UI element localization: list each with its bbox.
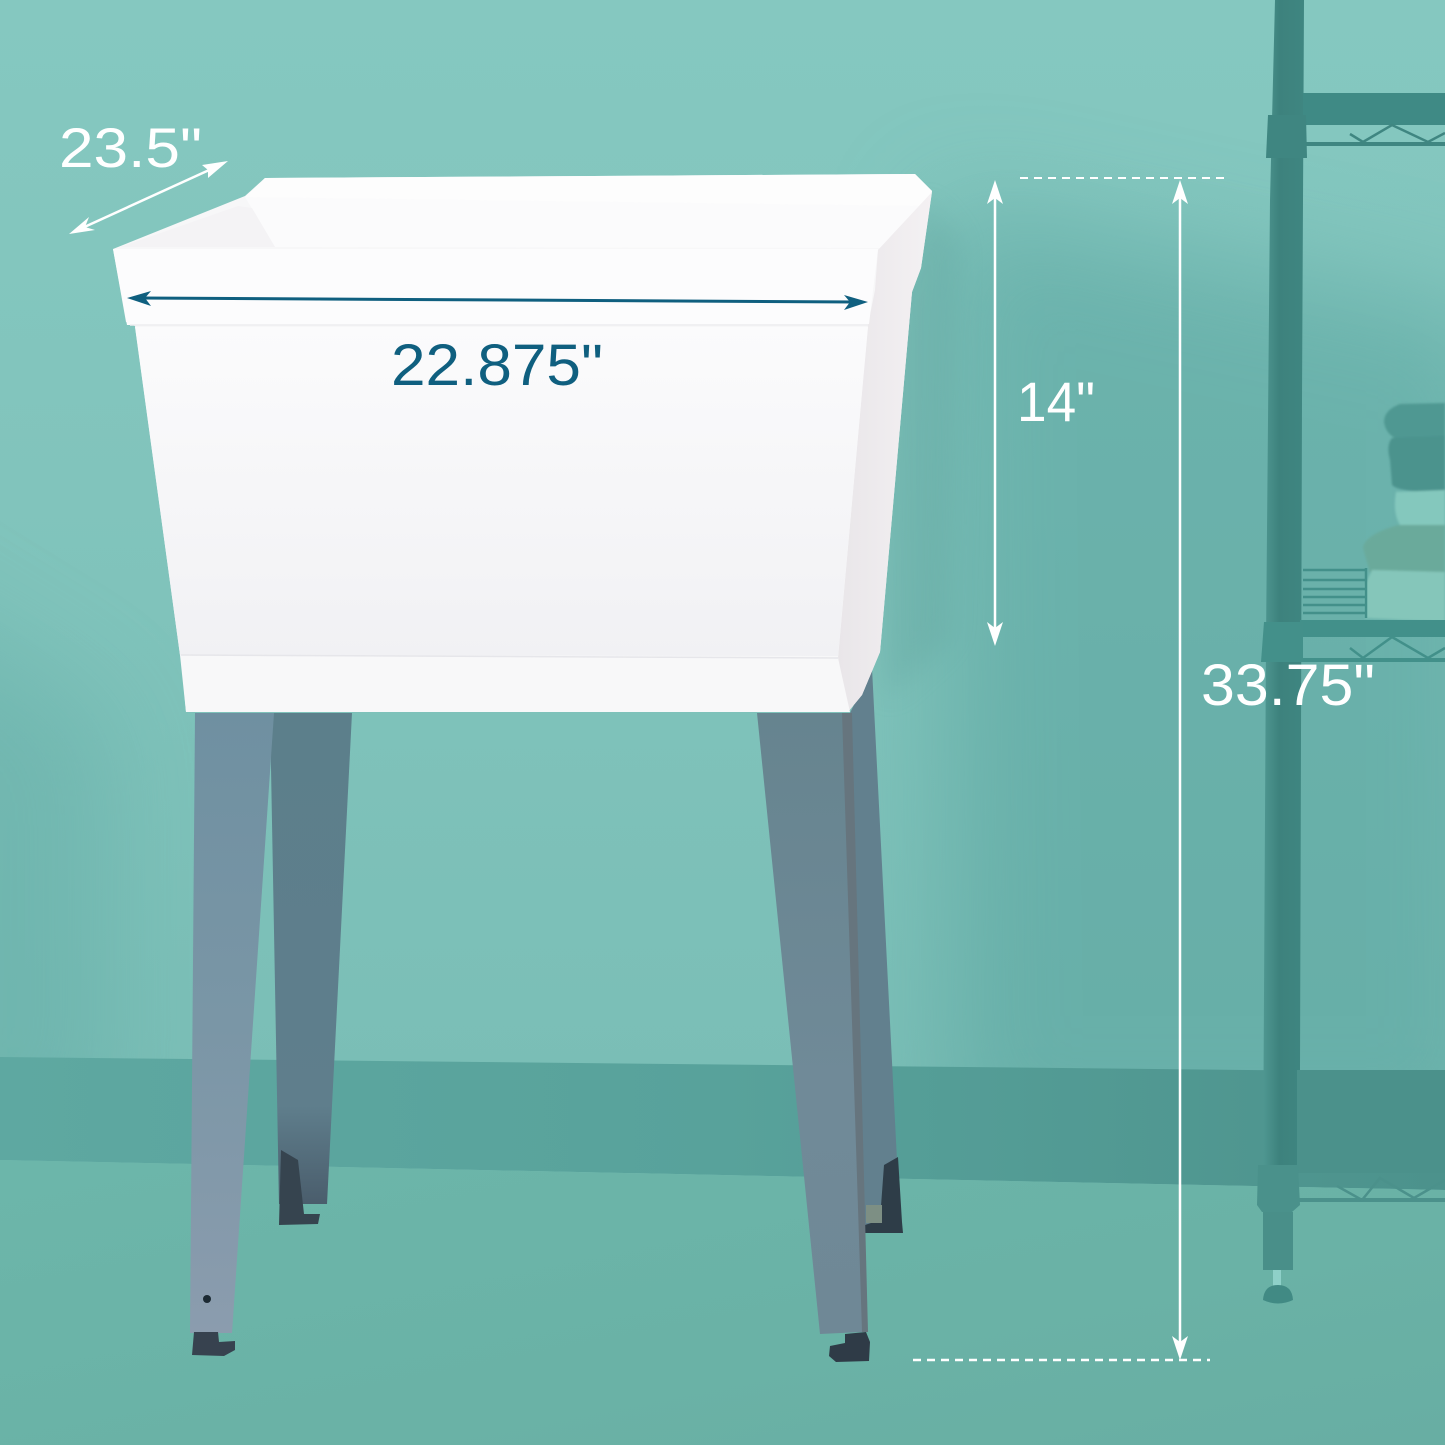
basin height label: 14" — [1017, 370, 1095, 433]
bottom shelf — [1257, 1070, 1445, 1304]
right side wall — [838, 192, 932, 712]
top shelf — [1266, 93, 1445, 158]
basin interior — [245, 197, 925, 248]
wall background — [0, 0, 1445, 1150]
front right leg — [757, 713, 868, 1334]
total height arrow — [1172, 180, 1188, 1360]
front left leg — [190, 713, 274, 1333]
total height top guide — [1020, 177, 1228, 179]
middle shelf — [1261, 568, 1445, 662]
baseboard — [0, 1057, 1445, 1190]
back right leg — [850, 668, 903, 1233]
front rim band — [113, 249, 878, 325]
depth label: 23.5" — [59, 116, 202, 179]
shelf post — [1263, 0, 1304, 1170]
leg bolt — [203, 1295, 211, 1303]
folded towels — [1363, 403, 1445, 622]
width label: 22.875" — [391, 333, 603, 398]
front left foot — [192, 1332, 235, 1356]
floor — [0, 1160, 1445, 1445]
bottom band — [181, 656, 850, 712]
sink stand legs — [190, 668, 903, 1362]
depth arrow — [69, 161, 228, 234]
total height label: 33.75" — [1201, 653, 1375, 718]
total height bottom guide — [913, 1359, 1210, 1361]
width arrow — [127, 291, 868, 310]
front body panel — [135, 327, 868, 656]
back rim — [245, 174, 932, 206]
wire shelving unit — [1257, 0, 1445, 1304]
back left leg — [270, 713, 352, 1225]
sink shadow on wall — [880, 200, 960, 700]
front right foot — [829, 1332, 870, 1362]
utility sink tub — [113, 174, 932, 712]
basin height arrow — [987, 180, 1003, 646]
tub silhouette — [113, 174, 932, 712]
